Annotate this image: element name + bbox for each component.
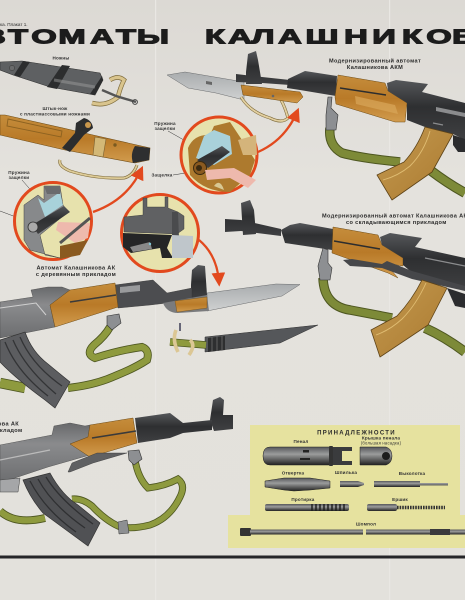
tool: cleaning rod xyxy=(240,528,465,536)
swivels xyxy=(128,450,142,465)
bayonet blade xyxy=(207,284,300,311)
sling xyxy=(68,327,148,388)
magazine xyxy=(371,280,447,357)
label: latch spring left: Пружина xyxy=(8,170,30,175)
upper gas section xyxy=(115,280,192,308)
caption: AKMS: со складывающимся прикладом xyxy=(346,220,447,226)
label: jag: Протирка xyxy=(291,497,315,502)
magazine xyxy=(0,332,70,408)
caption: AKM: Модернизированный автомат xyxy=(329,58,421,64)
folded stock arm xyxy=(68,453,127,472)
caption: AKS fragment xyxy=(0,422,22,434)
bayonet mount xyxy=(163,295,209,313)
caption: AK wooden stock: Автомат Калашникова АК xyxy=(37,266,115,272)
label: case: Пенал xyxy=(293,439,309,444)
arrow: muzzle inset to rifle xyxy=(199,240,219,282)
tool: screwdriver xyxy=(265,478,330,491)
handguard xyxy=(332,227,403,278)
label: latch spring left xyxy=(0,170,42,223)
receiver xyxy=(387,80,465,140)
label: case cap: (большая насадка) xyxy=(361,440,402,446)
receiver xyxy=(0,287,70,338)
lower handguard wood xyxy=(241,85,303,103)
receiver xyxy=(0,423,90,483)
inset: bayonet latch cutaway xyxy=(14,182,92,260)
gas section xyxy=(135,413,212,443)
icon: bayonet strap loop xyxy=(60,160,137,178)
heading: accessories: ПРИНАДЛЕЖНОСТИ xyxy=(317,430,396,436)
gas tube xyxy=(287,71,337,96)
label: cleaning rod: Шомпол xyxy=(356,522,376,526)
barrel and sight xyxy=(225,200,281,236)
arrow: AKM inset to bayonet xyxy=(258,112,297,152)
rifle: AK with wooden stock xyxy=(0,265,300,408)
caption: AK wooden stock: с деревянным прикладом xyxy=(36,272,116,278)
tool: brush xyxy=(367,504,445,511)
barrel and front sight xyxy=(236,51,290,85)
swivel xyxy=(318,248,332,280)
rifle: modernized AKM xyxy=(167,51,465,200)
panel: accessories xyxy=(228,425,465,548)
tool: pin xyxy=(340,481,364,487)
label: spring right xyxy=(151,121,198,178)
main handguard xyxy=(335,75,407,122)
label: brush: Ершик xyxy=(392,497,408,502)
panel: bayonet with plastic scabbard xyxy=(0,115,150,178)
inset: AKM bayonet mount cutaway xyxy=(181,117,257,193)
arrow: inset to bayonet xyxy=(93,170,141,212)
tool: jag xyxy=(265,504,349,511)
folded stock arm xyxy=(343,259,465,291)
label: latch spring left: защелки xyxy=(9,175,29,180)
sling xyxy=(323,278,392,318)
icon: scabbard frog xyxy=(92,78,137,104)
label: bayonet: Штык-нож xyxy=(42,106,68,111)
handguard xyxy=(50,283,118,327)
caption: AKM: Калашникова АКМ xyxy=(347,65,403,71)
tool: case cap xyxy=(360,447,392,465)
poster reference note: ка. Плакат 1. xyxy=(0,22,28,27)
front sight xyxy=(191,265,207,301)
label: drift: Выколотка xyxy=(399,471,426,476)
label: spring right: Защелка xyxy=(151,172,173,178)
sling xyxy=(72,460,183,528)
inset: muzzle locking xyxy=(122,194,198,272)
handguard xyxy=(70,418,137,457)
sling swivel xyxy=(326,97,338,130)
label: spring right: защелки xyxy=(155,126,175,131)
label: scabbard: Ножны xyxy=(52,56,70,60)
panel: bayonet scabbard xyxy=(0,61,137,104)
label: screwdriver: Отвертка xyxy=(282,470,305,476)
bottom rule xyxy=(0,556,465,558)
sling strap xyxy=(330,128,400,162)
label: pin: Шпилька xyxy=(335,470,357,475)
swivel xyxy=(107,314,121,330)
label: spring right: Пружина xyxy=(154,121,176,126)
label: bayonet: с пластмассовыми ножнами xyxy=(20,112,90,116)
strap xyxy=(170,342,206,345)
magazine xyxy=(23,473,100,546)
sling tan loop xyxy=(241,97,288,121)
tool: oil case xyxy=(263,446,352,466)
tool: drift xyxy=(374,481,448,487)
rifle: AKM with folding stock xyxy=(225,200,465,357)
gas tube xyxy=(281,223,333,250)
bayonet blade xyxy=(167,72,244,100)
rifle: AK with folding stock xyxy=(0,397,233,546)
front sight and muzzle xyxy=(210,397,233,431)
magazine xyxy=(377,127,453,200)
label: case cap: Крышка пенала xyxy=(362,436,400,440)
loose bayonet and scabbard xyxy=(170,323,318,355)
receiver xyxy=(380,233,465,290)
